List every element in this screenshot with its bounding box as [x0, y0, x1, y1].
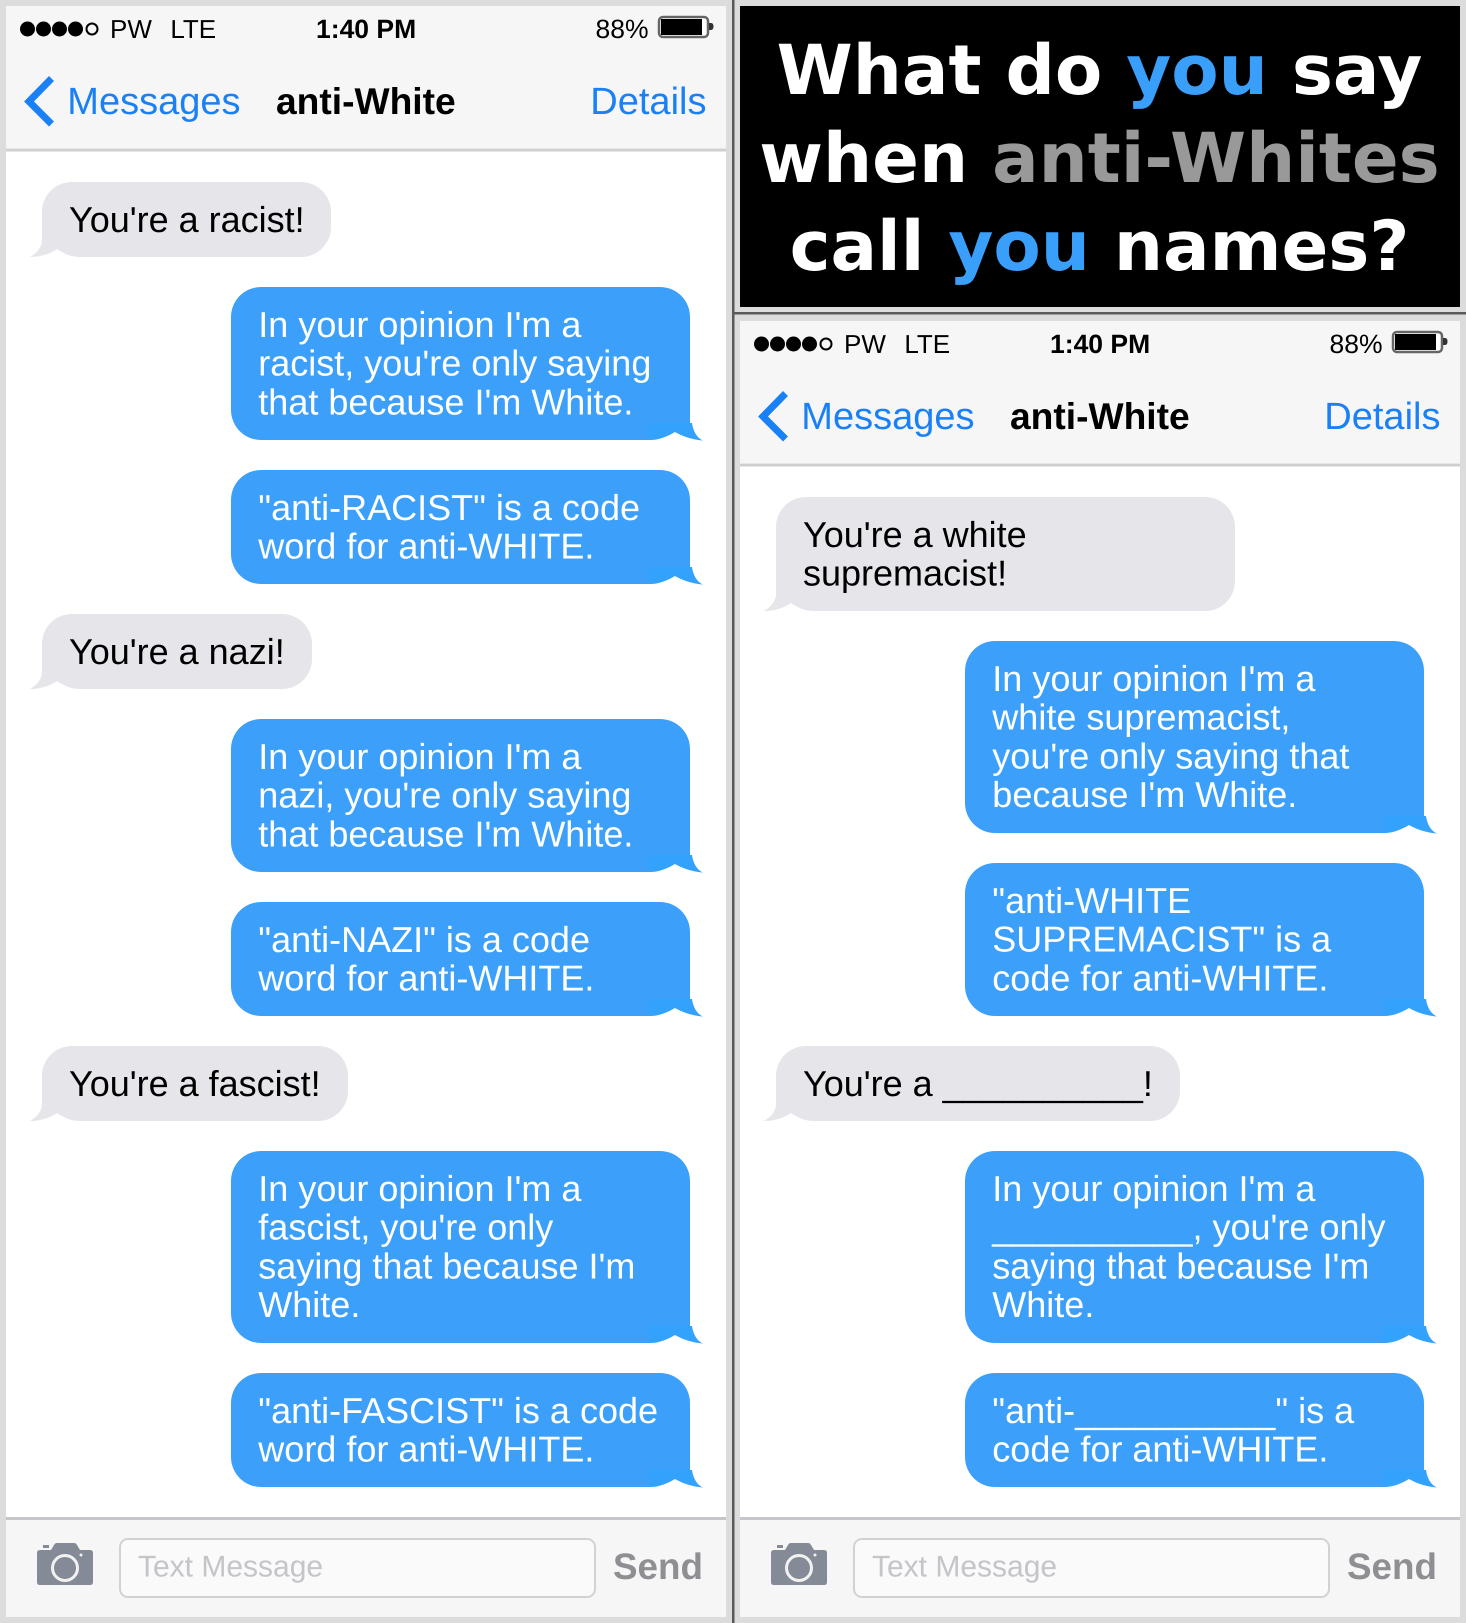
sent bubble: anti-white supremacist: [965, 863, 1437, 1016]
received bubble: fascist: You're a fascist!: [69, 1063, 321, 1104]
sent bubble: fascist opinion: [231, 1151, 703, 1344]
text input: [854, 1539, 1329, 1597]
sent bubble: anti-nazi: word for anti-WHITE.: [257, 958, 594, 999]
send button: Send: [1347, 1546, 1437, 1587]
sent bubble: anti-blank: code for anti-WHITE.: [992, 1429, 1328, 1470]
sent bubble: white supremacist opinion: you're only saying that: [992, 735, 1349, 776]
sent bubble: anti-white supremacist: "anti-WHITE: [992, 880, 1191, 921]
icon: battery: [1393, 332, 1448, 352]
text input: [120, 1539, 595, 1597]
sent bubble: blank opinion: __________, you're only: [991, 1207, 1385, 1248]
sent bubble: fascist opinion: fascist, you're only: [258, 1207, 553, 1248]
status bar: [740, 321, 1460, 381]
sent bubble: racist opinion: In your opinion I'm a: [258, 304, 582, 345]
received bubble: white supremacist: You're a white: [803, 514, 1027, 555]
sent bubble: nazi opinion: nazi, you're only saying: [258, 775, 631, 816]
title text: when anti-Whites: [759, 119, 1440, 199]
received bubble: racist: [30, 182, 331, 257]
sent bubble: anti-racist: [231, 470, 703, 584]
details link: Details: [590, 81, 706, 123]
navigation bar: [740, 381, 1460, 466]
sent bubble: nazi opinion: In your opinion I'm a: [258, 736, 582, 777]
received bubble: racist: You're a racist!: [69, 199, 305, 240]
sent bubble: blank opinion: White.: [992, 1284, 1094, 1325]
title text: call you names?: [790, 207, 1409, 287]
sent bubble: anti-fascist: "anti-FASCIST" is a code: [258, 1390, 658, 1431]
sent bubble: white supremacist opinion: because I'm White.: [992, 774, 1297, 815]
sent bubble: anti-fascist: [231, 1373, 703, 1488]
received bubble: fascist: [30, 1046, 348, 1121]
sent bubble: blank opinion: [965, 1151, 1437, 1344]
title panel: [740, 6, 1460, 307]
clock: 1:40 PM: [316, 14, 416, 44]
battery percent: 88%: [1330, 329, 1383, 359]
details link: Details: [1324, 396, 1440, 438]
carrier: PW LTE: [844, 329, 950, 359]
sent bubble: anti-white supremacist: code for anti-WHITE.: [992, 957, 1328, 998]
sent bubble: white supremacist opinion: In your opinion I'm a: [992, 658, 1316, 699]
sent bubble: anti-racist: word for anti-WHITE.: [257, 526, 594, 567]
sent bubble: blank opinion: In your opinion I'm a: [992, 1168, 1316, 1209]
panel: left phone conversation: [6, 6, 726, 1617]
sent bubble: fascist opinion: In your opinion I'm a: [258, 1168, 582, 1209]
sent bubble: anti-white supremacist: SUPREMACIST" is a: [992, 919, 1332, 960]
message input bar: [740, 1517, 1460, 1617]
sent bubble: anti-nazi: [231, 902, 703, 1016]
received bubble: blank: You're a __________!: [803, 1063, 1153, 1104]
received bubble: nazi: [30, 614, 312, 689]
signal dots: [754, 336, 832, 352]
sent bubble: anti-nazi: "anti-NAZI" is a code: [258, 919, 590, 960]
status bar: [6, 6, 726, 66]
sent bubble: racist opinion: racist, you're only saying: [258, 343, 651, 384]
carrier: PW LTE: [110, 14, 216, 44]
received bubble: nazi: You're a nazi!: [69, 631, 285, 672]
text input: Text Message: [138, 1550, 323, 1584]
received bubble: white supremacist: [764, 497, 1235, 611]
navigation bar: [6, 66, 726, 152]
sent bubble: fascist opinion: saying that because I'm: [258, 1245, 635, 1286]
sent bubble: anti-blank: [965, 1373, 1437, 1488]
send button: Send: [613, 1546, 703, 1587]
back label: Messages: [67, 81, 241, 123]
contact name: anti-White: [276, 80, 456, 122]
panel: right phone conversation: [740, 321, 1460, 1617]
sent bubble: racist opinion: that because I'm White.: [258, 381, 633, 422]
back label: Messages: [801, 396, 975, 438]
clock: 1:40 PM: [1050, 329, 1150, 359]
received bubble: white supremacist: supremacist!: [803, 553, 1007, 594]
title text: What do you say: [777, 31, 1422, 111]
text input: Text Message: [872, 1550, 1057, 1584]
battery percent: 88%: [596, 14, 649, 44]
signal dots: [20, 22, 98, 36]
sent bubble: anti-blank: "anti-__________" is a: [992, 1390, 1355, 1431]
contact name: anti-White: [1010, 395, 1190, 437]
icon: back chevron: [763, 394, 786, 439]
sent bubble: nazi opinion: [231, 719, 703, 872]
message input bar: [6, 1517, 726, 1617]
icon: back chevron: [29, 78, 52, 124]
icon: camera: [771, 1543, 827, 1585]
sent bubble: white supremacist opinion: [965, 641, 1437, 834]
icon: battery: [659, 17, 714, 37]
icon: camera: [37, 1543, 93, 1585]
sent bubble: racist opinion: [231, 287, 703, 440]
sent bubble: anti-racist: "anti-RACIST" is a code: [258, 487, 640, 528]
received bubble: blank: [764, 1046, 1180, 1121]
title text: [759, 31, 1440, 287]
sent bubble: blank opinion: saying that because I'm: [992, 1245, 1369, 1286]
sent bubble: white supremacist opinion: white supremacist,: [991, 697, 1290, 738]
sent bubble: anti-fascist: word for anti-WHITE.: [257, 1429, 594, 1470]
sent bubble: fascist opinion: White.: [258, 1284, 360, 1325]
sent bubble: nazi opinion: that because I'm White.: [258, 813, 633, 854]
